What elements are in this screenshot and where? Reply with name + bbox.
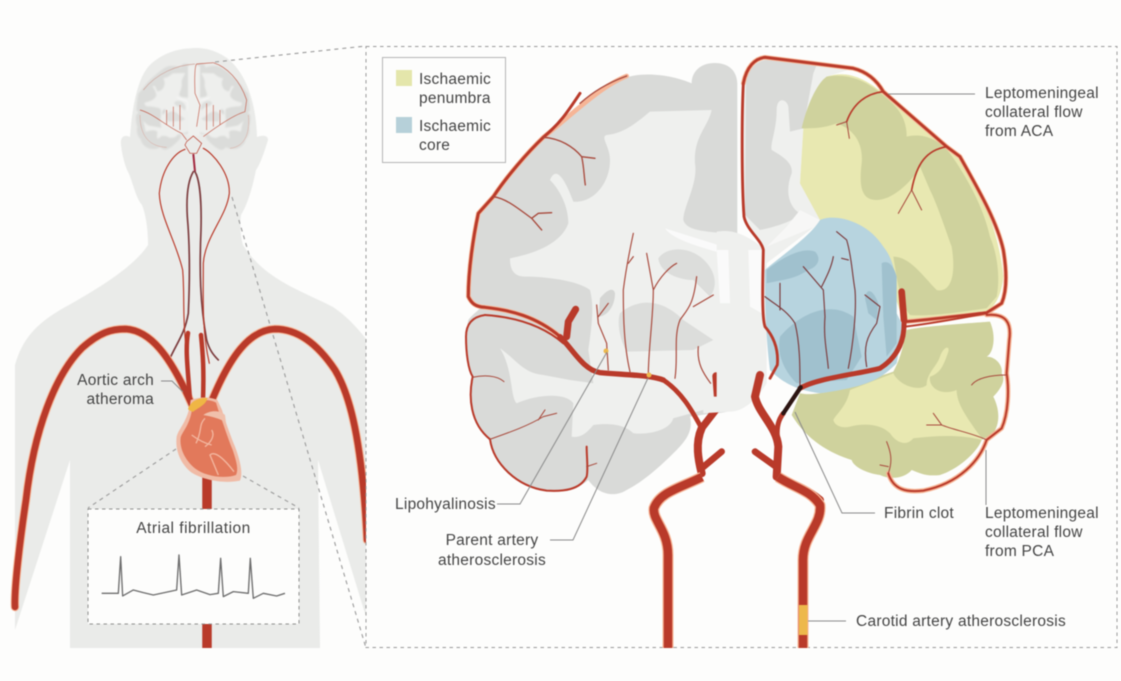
- ECG trace: [102, 555, 285, 598]
- label: aortic arch atheroma: Aortic arch: [77, 372, 154, 389]
- label: parent artery atherosclerosis: [438, 378, 648, 569]
- label: leptomeningeal collateral flow from PCA: [985, 450, 1099, 560]
- label: parent artery atherosclerosis: Parent artery: [446, 532, 538, 549]
- fibrin clot: [783, 387, 801, 413]
- label: leptomeningeal collateral flow from ACA: [888, 85, 1099, 140]
- label: leptomeningeal collateral flow from PCA: Leptomeningeal: [985, 505, 1099, 522]
- legend: penumbra: Ischaemic: [419, 71, 491, 88]
- label: leptomeningeal collateral flow from PCA: from PCA: [985, 543, 1055, 560]
- legend: [382, 58, 506, 162]
- label: leptomeningeal collateral flow from ACA: Leptomeningeal: [985, 85, 1099, 102]
- ischaemic penumbra: [800, 74, 1003, 322]
- inset: atrial fibrillation: [88, 509, 299, 624]
- vertebral arteries: [170, 172, 218, 360]
- small brain arteries: [140, 63, 249, 172]
- heart: [176, 397, 241, 482]
- inset title: Atrial fibrillation: [136, 520, 251, 537]
- right hemisphere: [703, 57, 1010, 500]
- arteries of torso and arms: [15, 329, 367, 648]
- label: fibrin clot: Fibrin clot: [884, 505, 954, 522]
- label: leptomeningeal collateral flow from PCA: collateral flow: [985, 524, 1083, 541]
- ischaemic core: [765, 218, 903, 393]
- legend: core: Ischaemic: [419, 118, 491, 135]
- carotid arteries: [654, 477, 820, 648]
- right hemisphere arteries: [742, 57, 1010, 500]
- small brain overview: [136, 63, 250, 172]
- grey cortex and white matter: [703, 57, 853, 413]
- label: fibrin clot: [795, 412, 954, 522]
- aortic arch atheroma: [188, 398, 207, 412]
- internal carotid arteries: [159, 149, 188, 363]
- legend: core: [396, 117, 491, 154]
- body silhouette: [15, 48, 367, 648]
- legend: penumbra: [396, 70, 491, 107]
- dashed zoom lines: [88, 46, 366, 648]
- label: aortic arch atheroma: atheroma: [87, 391, 154, 408]
- label: carotid artery atherosclerosis: Carotid artery atherosclerosis: [856, 613, 1066, 630]
- descending aorta: [202, 470, 212, 648]
- label: parent artery atherosclerosis: atherosclerosis: [438, 552, 546, 569]
- legend: core: core: [419, 137, 450, 154]
- label: leptomeningeal collateral flow from ACA: from ACA: [985, 123, 1054, 140]
- label: lipohyalinosis: Lipohyalinosis: [395, 496, 496, 513]
- legend: penumbra: penumbra: [419, 90, 491, 107]
- left hemisphere arteries: [466, 76, 722, 491]
- lower lobe penumbra: [792, 322, 1003, 478]
- panel: brain detail: [366, 46, 1117, 648]
- small atheroma markers: [604, 348, 652, 378]
- neck arteries: [159, 148, 229, 363]
- label: lipohyalinosis: [395, 352, 607, 513]
- label: aortic arch atheroma: [77, 372, 183, 408]
- label: leptomeningeal collateral flow from ACA: collateral flow: [985, 104, 1083, 121]
- left hemisphere: [466, 63, 743, 494]
- carotid artery atheroma: [799, 605, 808, 635]
